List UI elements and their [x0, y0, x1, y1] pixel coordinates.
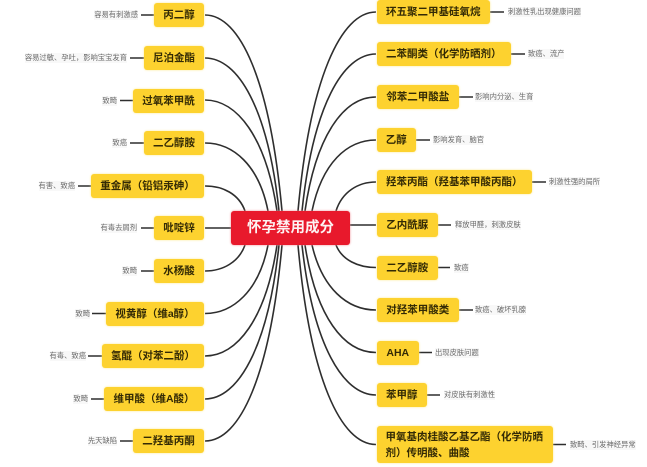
left node: 过氧苯甲酰: [133, 88, 204, 112]
left node: 吡啶锌: [154, 216, 204, 240]
left node: 水杨酸: 水杨酸: [163, 265, 195, 277]
right node: AHA: [376, 340, 419, 364]
right node: 苯甲醇: [376, 383, 427, 407]
left note: 吡啶锌: 有毒去屑剂: [101, 223, 137, 232]
left node: 视黄醇: [106, 302, 204, 326]
right note: 邻苯二甲酸盐: 影响内分泌、生育: [475, 92, 533, 101]
left note: 重金属: 有害、致癌: [39, 181, 75, 190]
left branch curves: [205, 15, 282, 441]
right branch curves: [298, 12, 376, 444]
left note: 二乙醇胺: 致癌: [112, 138, 127, 147]
left note: 丙二醇: 容易有刺激感: [94, 10, 138, 19]
left node: 重金属: 重金属（铅铝汞砷）: [100, 180, 195, 192]
left node: 吡啶锌: 吡啶锌: [163, 222, 195, 234]
left node: 维甲酸: [104, 387, 204, 411]
right node: 环五聚二甲基硅氧烷: 环五聚二甲基硅氧烷: [386, 6, 480, 18]
right note: 羟苯丙酯: 刺激性强的局所: [549, 177, 600, 186]
left note: 尼泊金酯: 容易过敏、孕吐，影响宝宝发育: [25, 53, 127, 62]
left node: 二乙醇胺: 二乙醇胺: [153, 137, 195, 149]
right node: 邻苯二甲酸盐: [376, 85, 459, 109]
central node: [231, 211, 350, 245]
right node: 乙内酰脲: 乙内酰脲: [386, 219, 428, 231]
right node: 甲氧基肉桂酸乙基乙酯: [376, 426, 553, 463]
left note: 视黄醇: 致畸: [75, 308, 90, 318]
left node: 二羟基丙酮: [133, 429, 204, 453]
right node: 苯甲醇: 苯甲醇: [386, 389, 418, 401]
right node: 乙醇: [376, 128, 416, 152]
right node: 二苯酮类: 二苯酮类（化学防晒剂）: [386, 48, 502, 60]
right note: 环五聚二甲基硅氧烷: 刺激性乳出现健康问题: [508, 7, 581, 16]
right note: 甲氧基肉桂酸乙基乙酯: 致畸、引发神经异常: [570, 440, 636, 448]
left node: 尼泊金酯: 尼泊金酯: [153, 52, 195, 64]
right node: 羟苯丙酯: [376, 170, 532, 194]
left node: 维甲酸: 维甲酸（维A酸）: [113, 393, 195, 405]
right node: 乙醇: 乙醇: [386, 134, 407, 146]
right node: 甲氧基肉桂酸乙基乙酯: 甲氧基肉桂酸乙基乙酯（化学防晒剂）传明酸、曲酸: [386, 430, 543, 458]
left node: 视黄醇: 视黄醇（维a醇）: [115, 308, 195, 320]
right note: 乙内酰脲: 释放甲醛，刺激皮肤: [455, 220, 521, 229]
right node: 羟苯丙酯: 羟苯丙酯（羟基苯甲酸丙酯）: [386, 176, 522, 188]
right node: 对羟苯甲酸类: [376, 298, 459, 322]
right node: AHA: AHA: [386, 346, 409, 358]
left node: 二羟基丙酮: 二羟基丙酮: [142, 435, 195, 447]
left node: 二乙醇胺: [144, 131, 204, 155]
left note: 水杨酸: 致畸: [122, 266, 137, 275]
left note: 氢醌: 有毒、致癌: [50, 351, 86, 360]
right node: 二乙醇胺: [376, 256, 438, 280]
left node: 过氧苯甲酰: 过氧苯甲酰: [142, 94, 195, 106]
right note: 苯甲醇: 对皮肤有刺激性: [444, 390, 495, 399]
leader lines to notes: [78, 12, 566, 444]
left node: 尼泊金酯: [144, 46, 204, 70]
left node: 重金属: [91, 174, 204, 198]
right node: 环五聚二甲基硅氧烷: [376, 0, 490, 24]
right node: 对羟苯甲酸类: 对羟苯甲酸类: [386, 304, 449, 316]
right note: 二乙醇胺: 致癌: [454, 262, 469, 272]
right note: 二苯酮类: 致癌、流产: [528, 49, 564, 58]
left node: 氢醌: 氢醌（对苯二酚）: [111, 350, 195, 362]
left note: 过氧苯甲酰: 致畸: [102, 96, 117, 104]
left node: 丙二醇: [154, 3, 204, 27]
left node: 丙二醇: 丙二醇: [163, 9, 195, 21]
left node: 水杨酸: [154, 259, 204, 283]
right note: 乙醇: 影响发育、脑官: [433, 135, 484, 144]
left note: 维甲酸: 致畸: [73, 394, 88, 403]
right node: 二乙醇胺: 二乙醇胺: [386, 262, 428, 274]
right note: AHA: 出现皮肤问题: [435, 348, 479, 356]
right node: 二苯酮类: [376, 42, 511, 66]
right node: 乙内酰脲: [376, 213, 438, 237]
central node: 怀孕禁用成分: [247, 220, 334, 236]
right note: 对羟苯甲酸类: 致癌、破坏乳腺: [475, 305, 526, 314]
left note: 二羟基丙酮: 先天缺陷: [88, 436, 117, 445]
right node: 邻苯二甲酸盐: 邻苯二甲酸盐: [386, 91, 449, 103]
left node: 氢醌: [102, 344, 204, 368]
